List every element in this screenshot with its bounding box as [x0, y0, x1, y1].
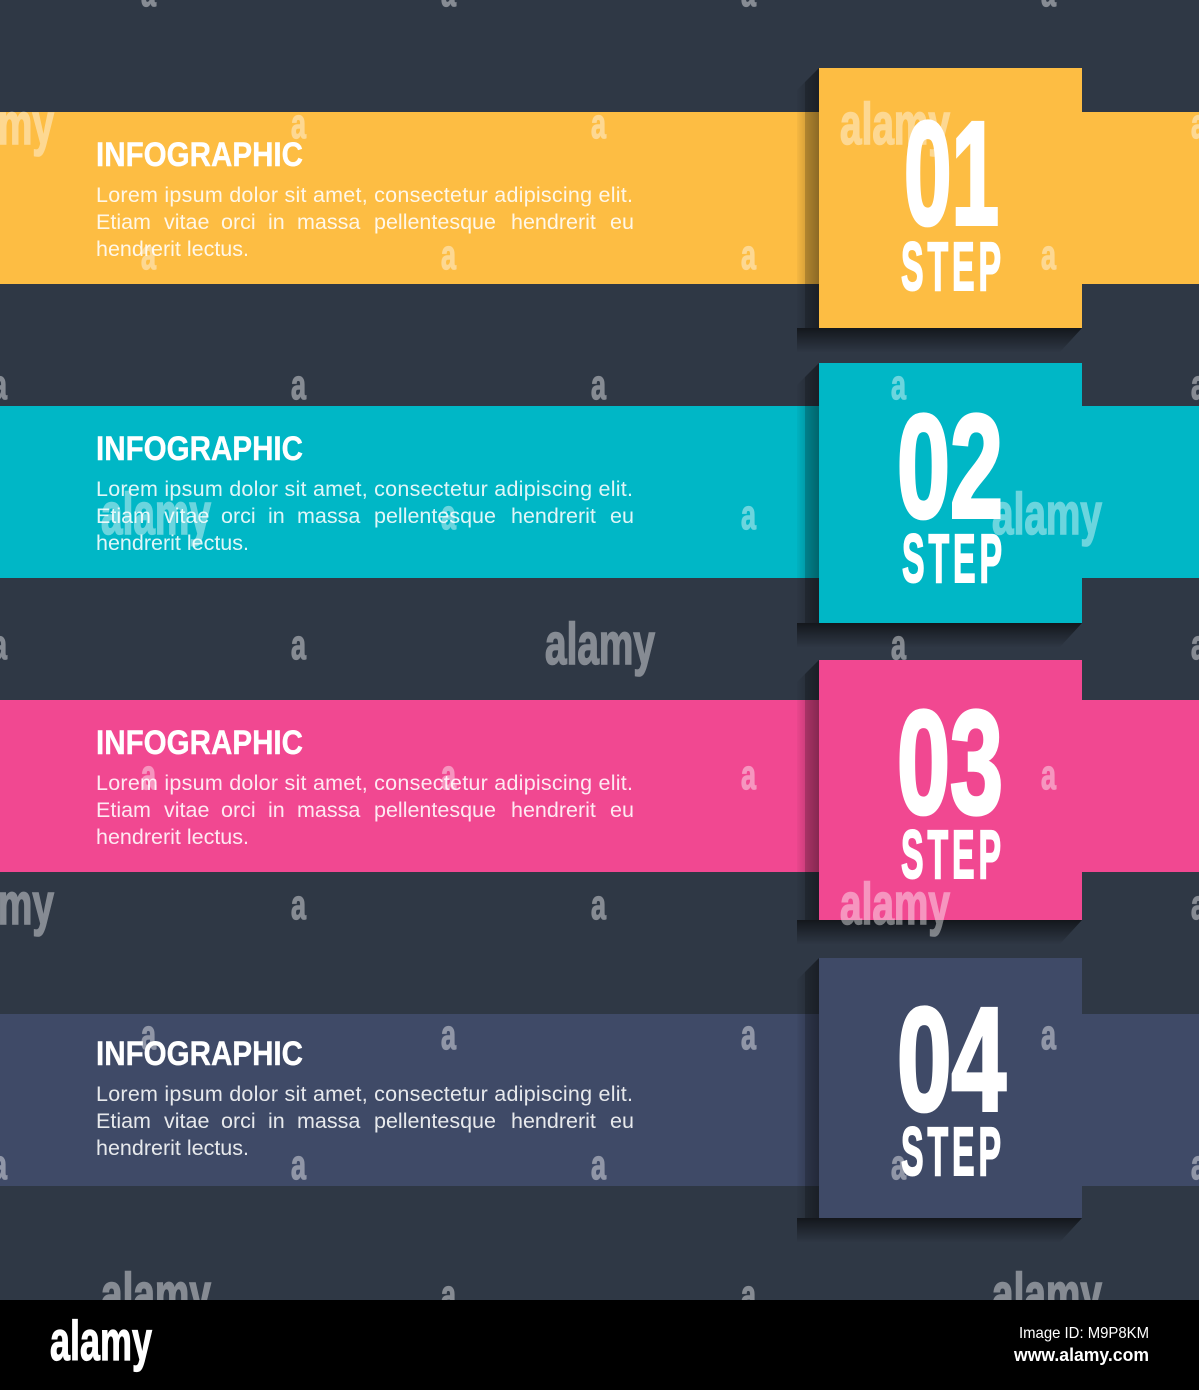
body text: hendrerit lectus.: [96, 237, 249, 261]
body text: massa: [297, 504, 360, 528]
heading: INFOGRAPHIC: [96, 1035, 303, 1073]
body text: eu: [610, 210, 634, 234]
watermarks: alamy: [101, 482, 211, 547]
watermarks: a: [591, 361, 606, 408]
body text: Etiam: [96, 1109, 151, 1133]
body text: [96, 1082, 634, 1160]
body text: pellentesque: [374, 504, 496, 528]
watermarks: a: [291, 1141, 306, 1188]
watermarks: a: [741, 1011, 756, 1058]
watermarks: alamy: [992, 1262, 1102, 1327]
body text: hendrerit: [511, 1109, 596, 1133]
watermarks: a: [741, 1271, 756, 1318]
panel: step 3: STEP: [901, 816, 1005, 893]
watermarks: alamy: [545, 612, 655, 677]
body text: vitae: [164, 210, 209, 234]
body text: Etiam: [96, 504, 151, 528]
watermarks: a: [591, 881, 606, 928]
panel: step 1: [0, 68, 1199, 352]
heading: INFOGRAPHIC: [96, 136, 303, 174]
watermarks: a: [441, 1011, 456, 1058]
body text: Lorem ipsum dolor sit amet, consectetur adipiscing elit.: [96, 1082, 633, 1106]
heading: INFOGRAPHIC: [96, 724, 303, 762]
number 02: 02: [897, 385, 1003, 549]
body text: [96, 771, 634, 849]
watermarks: a: [1041, 231, 1056, 278]
shadow: step 2: [797, 363, 1082, 647]
watermarks: a: [441, 491, 456, 538]
body text: hendrerit lectus.: [96, 825, 249, 849]
watermarks: a: [441, 751, 456, 798]
body text: orci: [221, 1109, 256, 1133]
body text: pellentesque: [374, 798, 496, 822]
footer bar: [0, 1300, 1199, 1390]
body text: eu: [610, 504, 634, 528]
watermarks: a: [291, 100, 306, 147]
body text: in: [268, 504, 285, 528]
footer logo: alamy: [50, 1309, 152, 1372]
square: step 4: [819, 958, 1082, 1218]
watermarks: a: [891, 361, 906, 408]
body text: in: [268, 798, 285, 822]
body text: massa: [297, 1109, 360, 1133]
heading: INFOGRAPHIC: [96, 430, 303, 468]
watermarks: a: [141, 751, 156, 798]
body text: orci: [221, 210, 256, 234]
watermarks: a: [291, 881, 306, 928]
body text: massa: [297, 798, 360, 822]
band: pink: [0, 700, 1199, 872]
watermarks: a: [441, 231, 456, 278]
watermarks: a: [741, 491, 756, 538]
body text: hendrerit: [511, 798, 596, 822]
watermarks: alamy: [992, 482, 1102, 547]
body text: Lorem ipsum dolor sit amet, consectetur adipiscing elit.: [96, 183, 633, 207]
body text: hendrerit: [511, 210, 596, 234]
square: step 3: [819, 660, 1082, 920]
watermarks: a: [291, 361, 306, 408]
body text: vitae: [164, 798, 209, 822]
watermarks: a: [891, 1141, 906, 1188]
band: navy: [0, 1014, 1199, 1186]
number 03: 03: [897, 681, 1003, 845]
body text: hendrerit lectus.: [96, 531, 249, 555]
number 01: 01: [904, 92, 999, 256]
panel: step 4: [0, 958, 1199, 1242]
body text: Etiam: [96, 210, 151, 234]
shadow: step 4: [797, 958, 1082, 1242]
body text: Etiam: [96, 798, 151, 822]
body text: orci: [221, 798, 256, 822]
watermarks: alamy: [840, 872, 950, 937]
watermarks: a: [1041, 751, 1056, 798]
watermarks: a: [591, 100, 606, 147]
website: www.alamy.com: [1013, 1345, 1149, 1365]
panel: step 3: [0, 660, 1199, 944]
band: teal: [0, 406, 1199, 578]
watermarks: alamy: [101, 1262, 211, 1327]
body text: in: [268, 210, 285, 234]
body text: hendrerit: [511, 504, 596, 528]
watermarks: a: [141, 231, 156, 278]
number 04: 04: [897, 978, 1006, 1142]
body text: pellentesque: [374, 1109, 496, 1133]
body text: pellentesque: [374, 210, 496, 234]
body text: [96, 183, 634, 261]
watermarks: a: [141, 1011, 156, 1058]
body text: massa: [297, 210, 360, 234]
watermarks: a: [891, 621, 906, 668]
panel: step 4: STEP: [901, 1113, 1005, 1190]
watermarks: a: [1041, 1011, 1056, 1058]
body text: vitae: [164, 1109, 209, 1133]
body text: eu: [610, 798, 634, 822]
image id: Image ID: M9P8KM: [1019, 1325, 1149, 1342]
body text: Lorem ipsum dolor sit amet, consectetur adipiscing elit.: [96, 477, 633, 501]
body text: hendrerit lectus.: [96, 1136, 249, 1160]
body text: in: [268, 1109, 285, 1133]
square: step 1: [819, 68, 1082, 328]
band: yellow: [0, 112, 1199, 284]
shadow: step 1: [797, 68, 1082, 352]
body text: orci: [221, 504, 256, 528]
panel: step 2: STEP: [902, 520, 1006, 597]
watermarks: a: [741, 231, 756, 278]
panel: step 1: STEP: [901, 228, 1005, 305]
watermarks: a: [441, 1271, 456, 1318]
watermarks: a: [741, 751, 756, 798]
body text: [96, 477, 634, 555]
watermarks: a: [591, 1141, 606, 1188]
watermarks: a: [291, 621, 306, 668]
panel: step 2: [0, 363, 1199, 647]
body text: vitae: [164, 504, 209, 528]
shadow: step 3: [797, 660, 1082, 944]
watermarks: alamy: [840, 92, 950, 157]
body text: eu: [610, 1109, 634, 1133]
body text: Lorem ipsum dolor sit amet, consectetur adipiscing elit.: [96, 771, 633, 795]
square: step 2: [819, 363, 1082, 623]
